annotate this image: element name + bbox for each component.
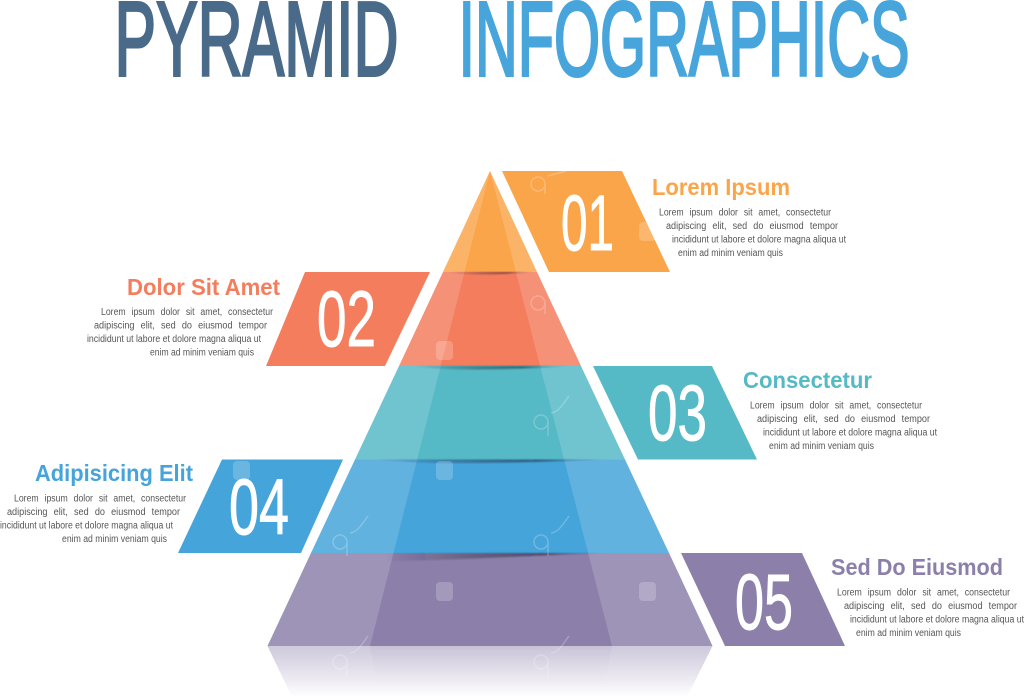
card 05 [681, 553, 845, 646]
card 05: 05 [735, 557, 793, 646]
text block 03: adipiscing elit, sed do eiusmod tempor [757, 414, 931, 425]
text block 01: enim ad minim veniam quis [678, 248, 783, 259]
text block 02 [87, 274, 280, 358]
text block 03: Consectetur [743, 367, 872, 393]
card 03 [593, 366, 757, 460]
card 03: 03 [648, 368, 707, 457]
text block 03: incididunt ut labore et dolore magna aliqua ut [763, 428, 937, 438]
text block 04: adipiscing elit, sed do eiusmod tempor [7, 507, 181, 518]
right light facet [490, 171, 712, 646]
pyramid [268, 171, 712, 697]
text block 04: enim ad minim veniam quis [62, 534, 167, 545]
card 02 [266, 272, 430, 366]
card 01: 01 [561, 178, 614, 267]
reflection below pyramid [268, 646, 712, 697]
left light facet [268, 171, 490, 646]
pyramid level 5: purple [268, 553, 712, 646]
text block 01 [652, 174, 846, 259]
pyramid level 4: blue [311, 460, 669, 553]
text block 01: Lorem Ipsum [652, 174, 790, 200]
card 01 [502, 171, 670, 272]
watermark marks [233, 171, 656, 676]
text block 03: enim ad minim veniam quis [769, 441, 874, 452]
card 02: 02 [317, 274, 376, 363]
text block 03: Lorem ipsum dolor sit amet, consectetur [750, 400, 923, 412]
text block 04: Lorem ipsum dolor sit amet, consectetur [14, 494, 187, 504]
text block 04 [0, 460, 193, 545]
text block 04: Adipisicing Elit [35, 460, 193, 486]
text block 04: incididunt ut labore et dolore magna aliqua ut [0, 520, 173, 532]
text block 01: incididunt ut labore et dolore magna aliqua ut [672, 234, 846, 246]
text block 01: adipiscing elit, sed do eiusmod tempor [666, 221, 839, 232]
text block 05: enim ad minim veniam quis [856, 628, 961, 639]
text block 05 [831, 554, 1024, 639]
text block 02: enim ad minim veniam quis [150, 348, 254, 358]
text block 01: Lorem ipsum dolor sit amet, consectetur [659, 208, 832, 218]
pyramid level 2: coral [399, 272, 581, 366]
text block 02: Dolor Sit Amet [127, 274, 280, 300]
card 04: 04 [229, 462, 289, 551]
text block 05: Sed Do Eiusmod [831, 554, 1003, 580]
pyramid level 3: teal [355, 366, 625, 460]
title [114, 0, 910, 98]
text block 02: incididunt ut labore et dolore magna aliqua ut [87, 334, 261, 345]
text block 02: Lorem ipsum dolor sit amet, consectetur [101, 307, 274, 318]
card 04 [178, 460, 343, 553]
text block 03 [743, 367, 937, 452]
pyramid level 1: orange [443, 171, 537, 272]
fold shadows between levels [370, 272, 610, 561]
text block 02: adipiscing elit, sed do eiusmod tempor [94, 320, 268, 332]
